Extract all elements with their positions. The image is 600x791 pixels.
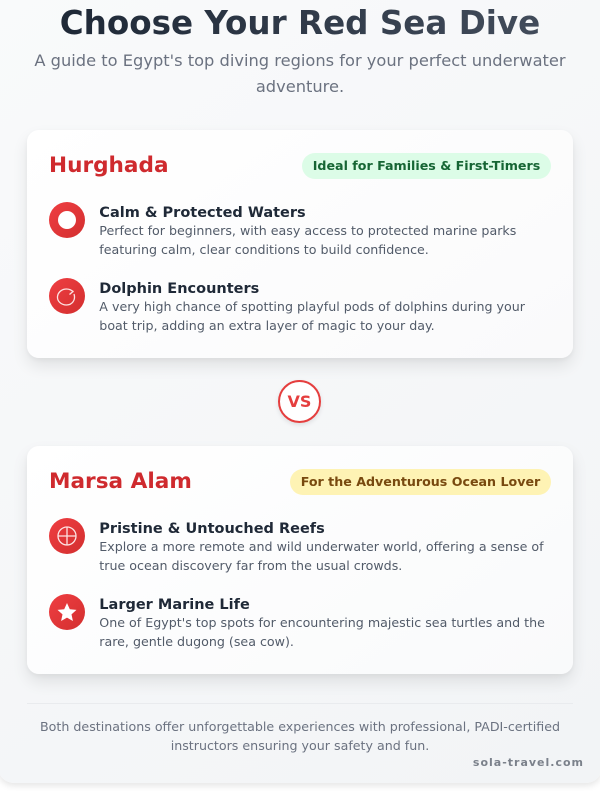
- VS badge: VS: [288, 392, 311, 411]
- feature heading: marine life: Larger Marine Life: [99, 597, 250, 613]
- feature text: reefs: Explore a more remote and wild underwater world, offering a sense of: [99, 539, 544, 554]
- badge: families: Ideal for Families & First-Timers: [313, 158, 540, 173]
- panel: Hurghada: [27, 130, 573, 358]
- panel: Marsa Alam: [27, 446, 573, 674]
- icon: dolphin swirl: [49, 278, 85, 314]
- feature heading: dolphins: Dolphin Encounters: [99, 281, 259, 297]
- subtitle: A guide to Egypt's top diving regions for your perfect underwater: [34, 50, 566, 70]
- feature text: dolphins: A very high chance of spotting playful pods of dolphins during your: [99, 299, 525, 314]
- badge: adventurous: For the Adventurous Ocean Lover: [301, 474, 540, 489]
- feature text: marine life: rare, gentle dugong (sea cow).: [99, 634, 294, 649]
- heading: Hurghada: Hurghada: [49, 153, 169, 178]
- source credit: sola-travel.com: [473, 756, 584, 769]
- icon: star: [49, 594, 85, 630]
- title: Choose Your Red Sea Dive: [60, 4, 540, 42]
- icon: ring: [49, 202, 85, 238]
- title: [0, 0, 600, 46]
- feature heading: reefs: Pristine & Untouched Reefs: [99, 521, 325, 537]
- icon: reef crosshair: [49, 518, 85, 554]
- feature text: dolphins: boat trip, adding an extra layer of magic to your day.: [99, 318, 435, 333]
- footer note: instructors ensuring your safety and fun.: [171, 738, 429, 752]
- badge: adventurous: [290, 469, 551, 495]
- heading: Marsa Alam: Marsa Alam: [49, 469, 192, 494]
- feature text: reefs: [99, 539, 544, 573]
- subtitle: [34, 50, 566, 96]
- feature text: marine life: [99, 615, 545, 649]
- footer note: Both destinations offer unforgettable experiences with professional, PADI-certified: [40, 719, 560, 734]
- footer divider: [27, 703, 573, 704]
- feature text: marine life: One of Egypt's top spots for encountering majestic sea turtles and the: [99, 615, 545, 630]
- feature text: calm waters: Perfect for beginners, with easy access to protected marine parks: [99, 223, 516, 238]
- feature text: dolphins: [99, 299, 525, 333]
- subtitle: adventure.: [256, 76, 344, 96]
- feature text: calm waters: featuring calm, clear conditions to build confidence.: [99, 242, 429, 257]
- feature text: reefs: true ocean discovery far from the usual crowds.: [99, 558, 402, 573]
- feature heading: calm waters: Calm & Protected Waters: [99, 205, 306, 221]
- footer note: [40, 719, 560, 752]
- VS badge: [278, 380, 321, 423]
- badge: families: [302, 153, 551, 179]
- feature text: calm waters: [99, 223, 516, 257]
